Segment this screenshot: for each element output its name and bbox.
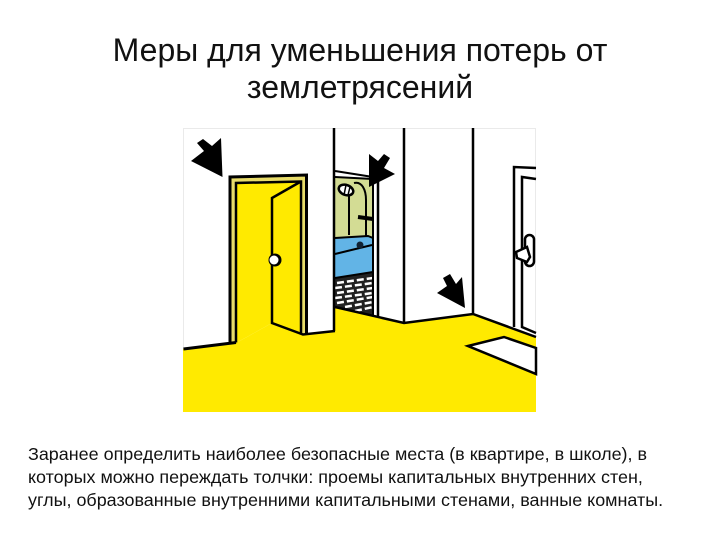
title — [113, 32, 607, 105]
yellow floor — [183, 307, 536, 412]
body text: углы, образованные внутренними капитальными стенами, ванные комнаты. — [28, 490, 663, 510]
bathroom interior — [335, 171, 373, 316]
body text: которых можно переждать толчки: проемы капитальных внутренних стен, — [28, 467, 643, 487]
body text — [28, 444, 663, 510]
title: землетрясений — [247, 69, 473, 105]
rug — [468, 337, 536, 374]
arrow 2 — [369, 154, 395, 187]
wall and floor lines — [334, 128, 473, 331]
title: Меры для уменьшения потерь от — [113, 32, 607, 68]
arrow 3 — [437, 274, 465, 308]
left door with yellow opening — [184, 175, 335, 349]
body text: Заранее определить наиболее безопасные места (в квартире, в школе), в — [28, 444, 647, 464]
arrow 1 — [191, 138, 222, 177]
right door with handle — [514, 167, 536, 333]
